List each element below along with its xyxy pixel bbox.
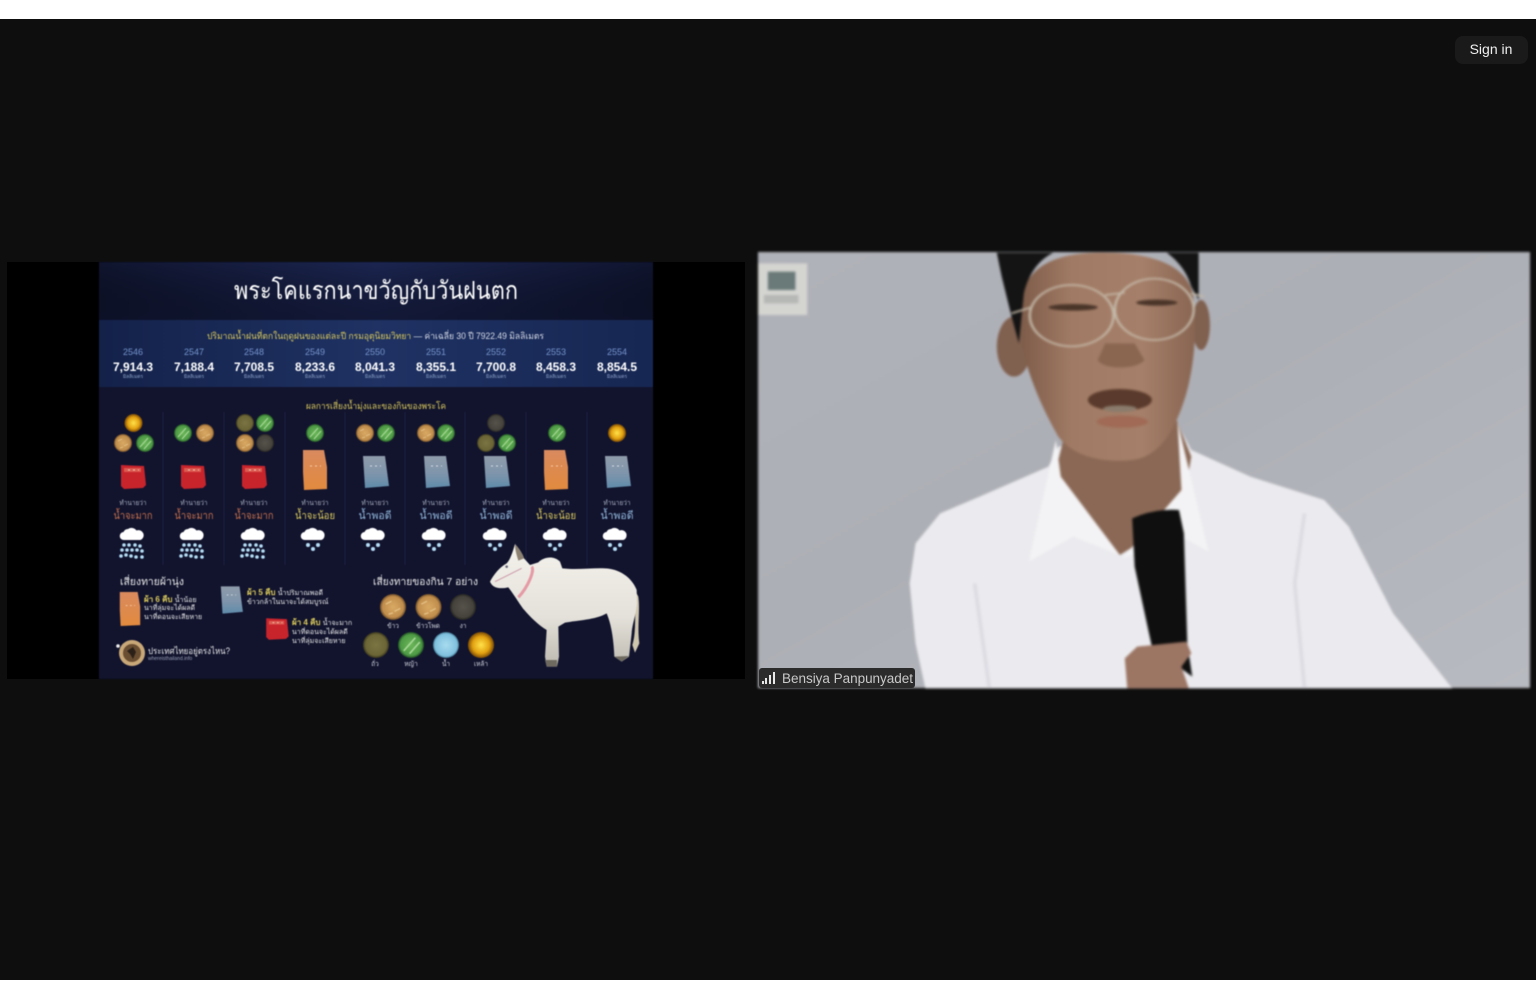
participant name tag: Bensiya Panpunyadet bbox=[782, 671, 913, 686]
sign in button bbox=[1455, 36, 1528, 64]
legend: four span cloth: นาที่ดอนจะได้ผลดี bbox=[292, 627, 348, 636]
panel: speaker video bbox=[758, 252, 1530, 688]
rainfall values by year: 8,854.5 bbox=[597, 360, 637, 374]
neck bbox=[1056, 420, 1191, 555]
food legend: งา bbox=[460, 623, 467, 630]
legend: six span cloth: นาที่ดอนจะเสียหาย bbox=[144, 612, 202, 621]
rainfall values by year: 8,041.3 bbox=[355, 360, 395, 374]
website credit: ประเทศไทยอยู่ตรงไหน? bbox=[148, 646, 230, 657]
wall background bbox=[758, 252, 1530, 688]
rainfall values by year: 8,458.3 bbox=[536, 360, 576, 374]
rainfall values by year: 2550 bbox=[365, 347, 385, 357]
prediction labels bbox=[114, 499, 634, 522]
prediction labels: น้ำจะน้อย bbox=[295, 508, 335, 522]
sign in button: Sign in bbox=[1470, 41, 1512, 57]
prediction labels: น้ำจะมาก bbox=[174, 508, 214, 522]
food legend bbox=[363, 594, 494, 668]
microphone bbox=[1132, 510, 1192, 677]
prediction heading: ผลการเสี่ยงน้ำมุ่งและของกินของพระโค bbox=[306, 399, 446, 412]
header band bbox=[99, 262, 653, 320]
prediction labels: ทำนายว่า bbox=[482, 499, 510, 507]
rainfall values by year: มิลลิเมตร bbox=[305, 373, 325, 380]
legend: five span cloth: ผ้า 5 คืบ น้ำปริมาณพอดี bbox=[247, 586, 323, 597]
food legend heading: เสี่ยงทายของกิน 7 อย่าง bbox=[373, 574, 478, 588]
glasses bbox=[1012, 279, 1204, 346]
food legend: ถั่ว bbox=[371, 659, 379, 668]
prediction labels: ทำนายว่า bbox=[422, 499, 450, 507]
rainfall values by year: มิลลิเมตร bbox=[607, 373, 627, 380]
prediction labels: น้ำพอดี bbox=[358, 508, 392, 522]
prediction labels: น้ำพอดี bbox=[420, 508, 452, 522]
rainfall values by year: 2547 bbox=[184, 347, 204, 357]
rainfall values by year: 7,914.3 bbox=[113, 360, 153, 374]
rainfall values by year: มิลลิเมตร bbox=[184, 373, 204, 380]
rainfall values by year: 7,700.8 bbox=[476, 360, 516, 374]
prediction labels: ทำนายว่า bbox=[361, 499, 389, 507]
rainfall values by year: 2553 bbox=[546, 347, 566, 357]
rainfall values by year: 2554 bbox=[607, 347, 627, 357]
prediction labels: ทำนายว่า bbox=[542, 499, 570, 507]
prediction labels: น้ำพอดี bbox=[480, 508, 512, 522]
rainfall values by year: มิลลิเมตร bbox=[365, 373, 385, 380]
legend: six span cloth: นาที่ลุ่มจะได้ผลดี bbox=[144, 603, 195, 612]
nose bbox=[1098, 343, 1144, 367]
rainfall values by year: 2546 bbox=[123, 347, 143, 357]
cloth legend heading: เสี่ยงทายผ้านุ่ง bbox=[120, 574, 184, 588]
illustration: presenter bbox=[758, 253, 1452, 688]
prediction labels: น้ำจะมาก bbox=[114, 508, 152, 522]
mouth bbox=[1088, 389, 1152, 428]
food legend: หญ้า bbox=[404, 660, 418, 668]
rainfall values by year bbox=[113, 347, 637, 380]
prediction labels: น้ำพอดี bbox=[600, 508, 634, 522]
prediction labels: ทำนายว่า bbox=[119, 499, 147, 507]
prediction labels: น้ำจะน้อย bbox=[536, 508, 576, 522]
illustration: white royal ox bbox=[490, 544, 639, 667]
rainfall values by year: มิลลิเมตร bbox=[426, 373, 446, 380]
rainfall values by year: 7,708.5 bbox=[234, 360, 274, 374]
hand bbox=[1125, 642, 1191, 688]
website credit: whereisthailand.info bbox=[148, 656, 192, 662]
food legend: น้ำ bbox=[442, 659, 450, 668]
food choices by year bbox=[114, 414, 626, 452]
prediction labels: ทำนายว่า bbox=[180, 499, 208, 507]
cloth icons by year bbox=[121, 450, 631, 490]
rainfall values by year: 8,233.6 bbox=[295, 360, 335, 374]
legend: four span cloth: นาที่ลุ่มจะเสียหาย bbox=[292, 636, 346, 645]
website credit bbox=[148, 646, 230, 662]
rainfall values by year: มิลลิเมตร bbox=[123, 373, 143, 380]
food legend: เหล้า bbox=[474, 660, 488, 668]
white bottom letterbox bar bbox=[0, 980, 1536, 999]
rainfall values by year: มิลลิเมตร bbox=[244, 373, 264, 380]
shared screen black frame bbox=[7, 262, 745, 679]
participant name tag bbox=[759, 668, 915, 688]
hair bbox=[997, 253, 1199, 343]
panel: infographic slide bbox=[99, 262, 653, 679]
rainfall data band bbox=[99, 320, 653, 387]
face bbox=[1019, 253, 1195, 461]
rainfall values by year: 8,355.1 bbox=[416, 360, 456, 374]
rainfall values by year: 2548 bbox=[244, 347, 264, 357]
rainfall values by year: 7,188.4 bbox=[174, 360, 214, 374]
prediction labels: ทำนายว่า bbox=[603, 499, 631, 507]
rain cloud icons bbox=[119, 528, 627, 559]
legend: four span cloth bbox=[266, 616, 352, 645]
food legend: ข้าวโพด bbox=[416, 622, 440, 630]
rainfall subheading: ปริมาณน้ำฝนที่ตกในฤดูฝนของแต่ละปี กรมอุตุนิยมวิทยา — ค่าเฉลี่ย 30 ปี 7922.49 มิลลิเมตร bbox=[207, 329, 544, 342]
legend: four span cloth: ผ้า 4 คืบ น้ำจะมาก bbox=[292, 616, 352, 627]
prediction labels: ทำนายว่า bbox=[240, 499, 268, 507]
slide background bbox=[99, 262, 653, 679]
legend: six span cloth bbox=[120, 592, 202, 626]
rainfall values by year: มิลลิเมตร bbox=[546, 373, 566, 380]
thermostat on wall bbox=[758, 263, 807, 315]
prediction labels: ทำนายว่า bbox=[301, 499, 329, 507]
rainfall values by year: มิลลิเมตร bbox=[486, 373, 506, 380]
legend: six span cloth: ผ้า 6 คืบ น้ำน้อย bbox=[144, 593, 197, 604]
white top letterbox bar bbox=[0, 0, 1536, 19]
prediction labels: น้ำจะมาก bbox=[234, 508, 274, 522]
white shirt bbox=[910, 422, 1452, 688]
rainfall values by year: 2552 bbox=[486, 347, 506, 357]
rainfall values by year: 2551 bbox=[426, 347, 446, 357]
legend: five span cloth: ข้าวกล้าในนาจะได้สมบูรณ์ bbox=[247, 597, 329, 606]
rainfall values by year: 2549 bbox=[305, 347, 325, 357]
ears bbox=[997, 300, 1210, 377]
food legend: ข้าว bbox=[387, 622, 399, 630]
eyes bbox=[1048, 300, 1177, 311]
icon: coffee cup logo bbox=[116, 640, 145, 666]
title: พระโคแรกนาขวัญกับวันฝนตก bbox=[234, 276, 518, 305]
legend: five span cloth bbox=[221, 586, 329, 614]
